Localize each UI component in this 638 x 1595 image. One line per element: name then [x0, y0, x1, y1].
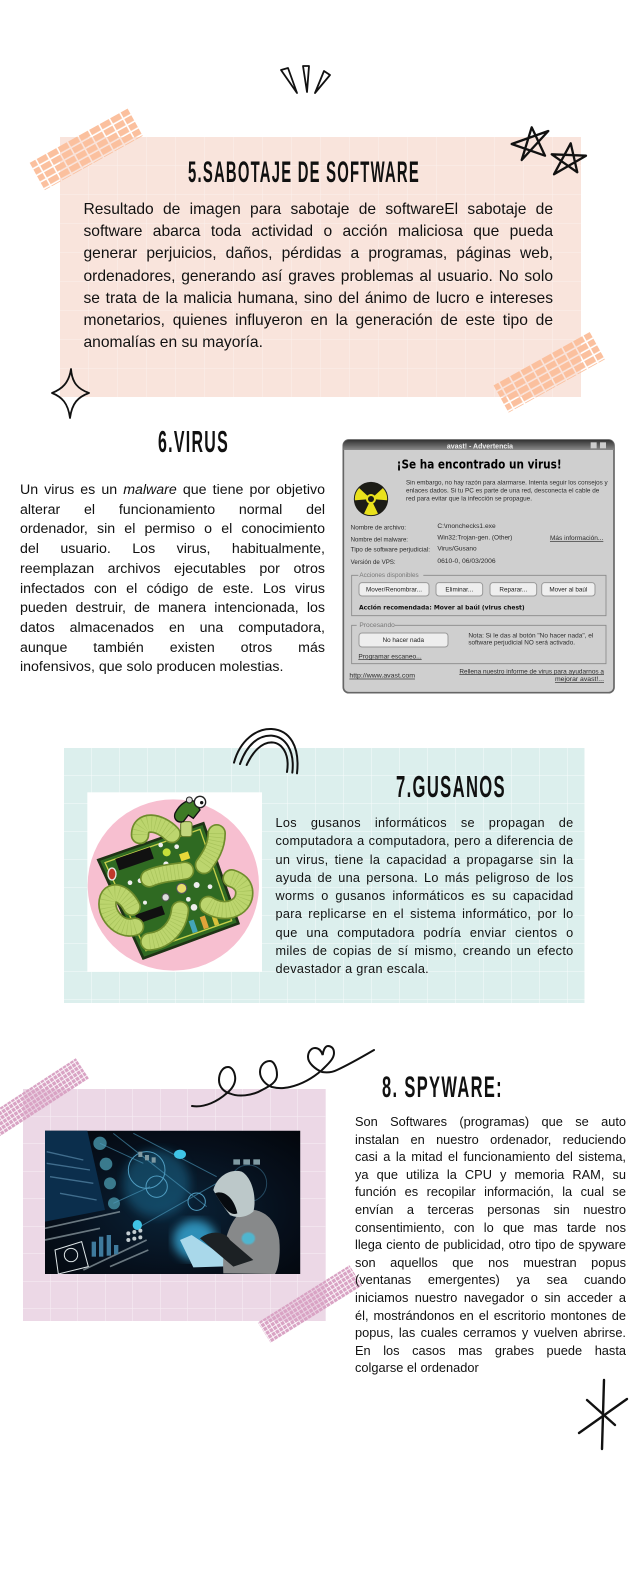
text block: virus: datos almacenados en una computadora,: [20, 620, 325, 636]
image: avast virus warning window: No hacer nada: [383, 637, 425, 644]
image: avast virus warning window: Mover/Renombrar...: [366, 587, 422, 594]
image: avast virus warning window: mejorar avast!...: [555, 676, 604, 683]
text block: spyware: iniciamos nuestro navegador o sin acceder a: [355, 1290, 626, 1305]
image: avast virus warning window: Reparar...: [499, 587, 527, 594]
text block: gusanos: worms o gusanos informáticos es su capacidad: [276, 889, 574, 903]
text block: gusanos: devastador a gran escala.: [276, 962, 429, 976]
image: worms on circuit board: [87, 792, 262, 972]
text block: sabotaje de software: software abarca toda actividad o acción maliciosa que pueda: [84, 223, 553, 240]
text block: virus: [20, 482, 325, 675]
tape: upper left pink: [0, 1058, 89, 1144]
image: avast virus warning window: Nombre de archivo:: [351, 524, 406, 531]
text block: virus: Un virus es un malware que tiene por objetivo: [20, 482, 325, 498]
image: avast virus warning window: Tipo de software perjudicial:: [351, 546, 430, 553]
text block: virus: reemplazan archivos ejecutables por otros: [20, 561, 325, 577]
icon: three spikes: [281, 66, 330, 93]
image: hooded hacker with holographic screens: [45, 1131, 300, 1274]
text block: spyware: (ventanas emergentes) ya sea cuando: [355, 1272, 626, 1287]
image: avast virus warning window: 0610-0, 06/03/2006: [437, 558, 496, 565]
image: avast virus warning window: ¡Se ha encontrado un virus!: [397, 458, 562, 472]
text block: gusanos: computadora a computadora, pero a diferencia de: [276, 834, 574, 848]
text block: gusanos: que una computadora podría enviar cientos o: [276, 926, 574, 940]
image: avast virus warning window: C:\monchecks1.exe: [437, 523, 496, 530]
text block: virus: alterar el funcionamiento normal del: [20, 502, 325, 518]
image: avast virus warning window: Win32:Trojan-gen. (Other): [437, 535, 512, 542]
icon: four-point sparkle: [52, 369, 89, 418]
icon: rainbow arcs: [234, 729, 298, 773]
image: avast virus warning window: Mover al baúl: [549, 587, 587, 594]
text block: virus: pueden destruir, de manera intencionada, los: [20, 600, 325, 616]
text block: gusanos: Los gusanos informáticos se propagan de: [276, 816, 574, 830]
text block: spyware: colgarse el ordenador: [355, 1360, 479, 1375]
text block: spyware: popus, las cuales cerramos y vuelven abrirse.: [355, 1325, 626, 1340]
image: avast virus warning window: Versión de VPS:: [351, 559, 396, 566]
panel: spyware: [23, 1089, 326, 1321]
image: avast virus warning window: Rellena nuestro informe de virus para ayudarnos a: [459, 668, 604, 675]
text block: gusanos: ayuda de una persona. Lo más peligroso de los: [276, 871, 574, 885]
text block: spyware: consentimiento, con lo que mas tarde nos: [355, 1220, 626, 1235]
text block: spyware: función es recopilar información, la cual se: [355, 1184, 626, 1199]
image: avast virus warning window: Programar escaneo...: [358, 653, 422, 660]
text block: spyware: [355, 1114, 626, 1375]
text block: virus: del usuario. Los virus, habitualmente,: [20, 541, 325, 557]
image: avast virus warning window: Nombre del malware:: [351, 536, 408, 543]
text block: spyware: llega ciento de publicidad, otro tipo de spyware: [355, 1237, 626, 1252]
image: avast virus warning window: Más información...: [550, 535, 603, 542]
heading: 6.Virus: 6.VIRUS: [158, 424, 229, 459]
image: avast virus warning window: Sin embargo, no hay razón para alarmarse. Intenta seguir los consejos y: [406, 480, 608, 487]
text block: gusanos: miles de copias de sí mismo, creando un efecto: [276, 944, 574, 958]
image: avast virus warning window: avast! - Advertencia: [447, 443, 513, 450]
icon: curly line with loops and heart: [192, 1046, 374, 1106]
image: avast virus warning window: Acciones disponibles: [359, 572, 419, 579]
image: avast virus warning window: http://www.avast.com: [349, 673, 415, 680]
text block: virus: aunque también existen otros más: [20, 640, 325, 656]
text block: sabotaje de software: Resultado de imagen para sabotaje de softwareEl sabotaje de: [84, 201, 553, 218]
text block: sabotaje de software: generar perjuicios, daños, pérdidas a programas, páginas web,: [84, 245, 553, 262]
image: avast virus warning window: Procesando: [359, 622, 395, 629]
image: avast virus warning window: software perjudicial NO será activado.: [468, 640, 575, 647]
image: avast virus warning window: Nota: Si le das al botón "No hacer nada", el: [468, 632, 594, 639]
image: avast virus warning window: red para evitar que la infección se propague.: [406, 496, 532, 503]
tape: lower right pink: [258, 1265, 362, 1343]
text block: sabotaje de software: anomalías en su mayoría.: [84, 334, 263, 351]
icon: two hand-drawn stars: [512, 127, 586, 174]
image: avast virus warning window: Eliminar...: [445, 587, 473, 594]
panel: sabotaje de software: [60, 137, 581, 397]
image: avast virus warning window: enlaces dados. Si tu PC es parte de una red, desconecta el cable de: [406, 488, 600, 495]
image: avast virus warning window: Virus/Gusano: [437, 546, 477, 553]
text block: spyware: él, mostrándonos en el escritorio montones de: [355, 1308, 626, 1323]
text block: spyware: Son Softwares (programas) que se auto: [355, 1114, 626, 1129]
text block: spyware: son aquellos que nos muestran popus: [355, 1255, 626, 1270]
image: avast virus warning window: [343, 440, 614, 693]
text block: gusanos: para replicarse en el sistema informático, por lo: [276, 907, 574, 921]
text block: gusanos: un virus, tiene la capacidad a propagarse sin la: [276, 853, 574, 867]
text block: spyware: En los casos mas grabes puede hasta: [355, 1343, 626, 1358]
heading: 8. Spyware: 8. SPYWARE:: [382, 1071, 503, 1104]
text block: gusanos: [276, 816, 574, 976]
tape: top left peach: [29, 108, 143, 190]
text block: spyware: ya que utiliza la CPU y memoria RAM, su: [355, 1167, 626, 1182]
heading: 7.Gusanos: 7.GUSANOS: [396, 769, 506, 804]
tape: bottom right peach: [493, 331, 605, 413]
text block: sabotaje de software: [84, 201, 554, 351]
text block: virus: ordenador, sin el permiso o el conocimiento: [20, 521, 325, 537]
text block: virus: infectados con el código de este. Los virus: [20, 581, 325, 597]
panel: gusanos: [64, 748, 584, 1003]
text block: sabotaje de software: monetarios, quienes influyeron en la generación de este tipo de: [84, 312, 553, 329]
text block: sabotaje de software: ordenadores, generando así graves problemas al usuario. No solo: [84, 268, 553, 285]
text block: virus: inofensivos, que solo producen molestias.: [20, 659, 283, 675]
text block: spyware: envían a terceras personas sin nuestro: [355, 1202, 626, 1217]
text block: spyware: instalan en nuestro ordenador, reduciendo: [355, 1132, 626, 1147]
icon: hand-drawn asterisk: [579, 1380, 627, 1449]
image: avast virus warning window: Acción recomendada: Mover al baúl (virus chest): [359, 604, 525, 612]
text block: sabotaje de software: se trata de la malicia humana, sino del ánimo de lucro e intereses: [84, 290, 553, 307]
text block: spyware: casi a la mitad el funcionamiento del sistema,: [355, 1149, 626, 1164]
